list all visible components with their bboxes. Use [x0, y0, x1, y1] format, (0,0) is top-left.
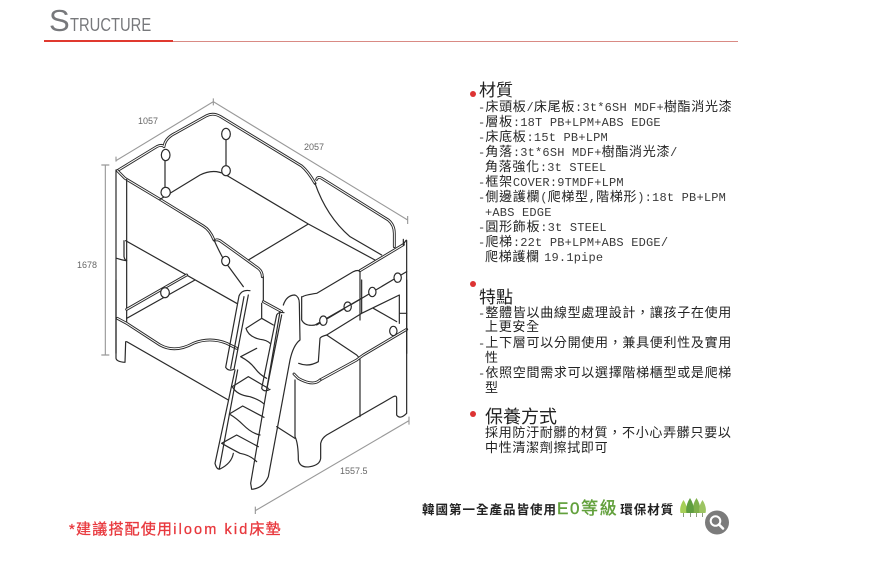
features list: 型	[485, 380, 499, 395]
materials section	[470, 81, 732, 265]
features section	[470, 281, 732, 395]
care heading: 保養方式	[485, 407, 557, 427]
care text: 採用防汙耐髒的材質，不小心弄髒只要以	[485, 425, 732, 440]
width dimension line	[255, 417, 409, 514]
dimension label 1057: 1057	[138, 116, 158, 126]
features list: -依照空間需求可以選擇階梯櫃型或是爬梯	[478, 365, 732, 381]
dimension lines	[101, 98, 408, 355]
materials list: 角落強化:3t STEEL	[485, 159, 606, 175]
materials list: -側邊護欄(爬梯型,階梯形):18t PB+LPM	[478, 189, 726, 205]
materials bullet	[470, 91, 476, 97]
dimension label 1557.5: 1557.5	[340, 466, 368, 476]
features list: -整體皆以曲線型處理設計，讓孩子在使用	[478, 305, 732, 321]
materials list: -床底板:15t PB+LPM	[478, 129, 608, 145]
materials list: -層板:18T PB+LPM+ABS EDGE	[478, 114, 661, 130]
features list: 性	[485, 350, 499, 365]
title	[49, 3, 151, 38]
features bullet	[470, 281, 476, 287]
title: S	[49, 3, 70, 38]
title: TRUCTURE	[70, 15, 151, 35]
care text: 中性清潔劑擦拭即可	[485, 440, 608, 455]
materials list: -床頭板/床尾板:3t*6SH MDF+樹酯消光漆	[478, 99, 732, 115]
dimension label 1678: 1678	[77, 260, 97, 270]
dimension label 2057: 2057	[304, 142, 324, 152]
care bullet	[470, 411, 476, 417]
materials list: -爬梯:22t PB+LPM+ABS EDGE/	[478, 234, 668, 250]
lower bunk and ladder	[116, 280, 409, 514]
materials list: -角落:3t*6SH MDF+樹酯消光漆/	[478, 144, 678, 160]
ladder steps	[222, 302, 282, 462]
materials list: -圓形飾板:3t STEEL	[478, 219, 607, 235]
materials list	[478, 99, 732, 265]
near rail	[116, 170, 263, 353]
right lower structure	[294, 280, 407, 467]
features list: 上更安全	[485, 319, 540, 334]
materials list: +ABS EDGE	[485, 206, 552, 220]
materials list: -框架COVER:9TMDF+LPM	[478, 174, 624, 190]
care section	[470, 407, 732, 455]
far rail	[117, 114, 394, 255]
end panel	[303, 239, 407, 353]
ladder left stringer and handrail	[215, 290, 250, 469]
E0 eco material statement: 韓國第一全產品皆使用E0等級環保材質	[422, 499, 674, 518]
upper bunk and dimensions	[101, 98, 408, 355]
title underline	[44, 40, 738, 42]
lower front rail	[116, 280, 295, 438]
materials list: 爬梯護欄 19.1pipe	[485, 249, 603, 265]
lower bunk back panel	[117, 241, 237, 318]
materials heading: 材質	[479, 81, 513, 100]
features list: -上下層可以分開使用，兼具便利性及實用	[478, 335, 732, 351]
round trim discs	[161, 128, 230, 266]
features heading: 特點	[479, 288, 513, 307]
mattress recommendation note: *建議搭配使用iloom kid床墊	[69, 521, 282, 538]
ladder right stringer and handrail	[251, 295, 300, 489]
mattress deck	[160, 171, 375, 260]
features list	[478, 305, 732, 395]
care text	[485, 425, 732, 455]
